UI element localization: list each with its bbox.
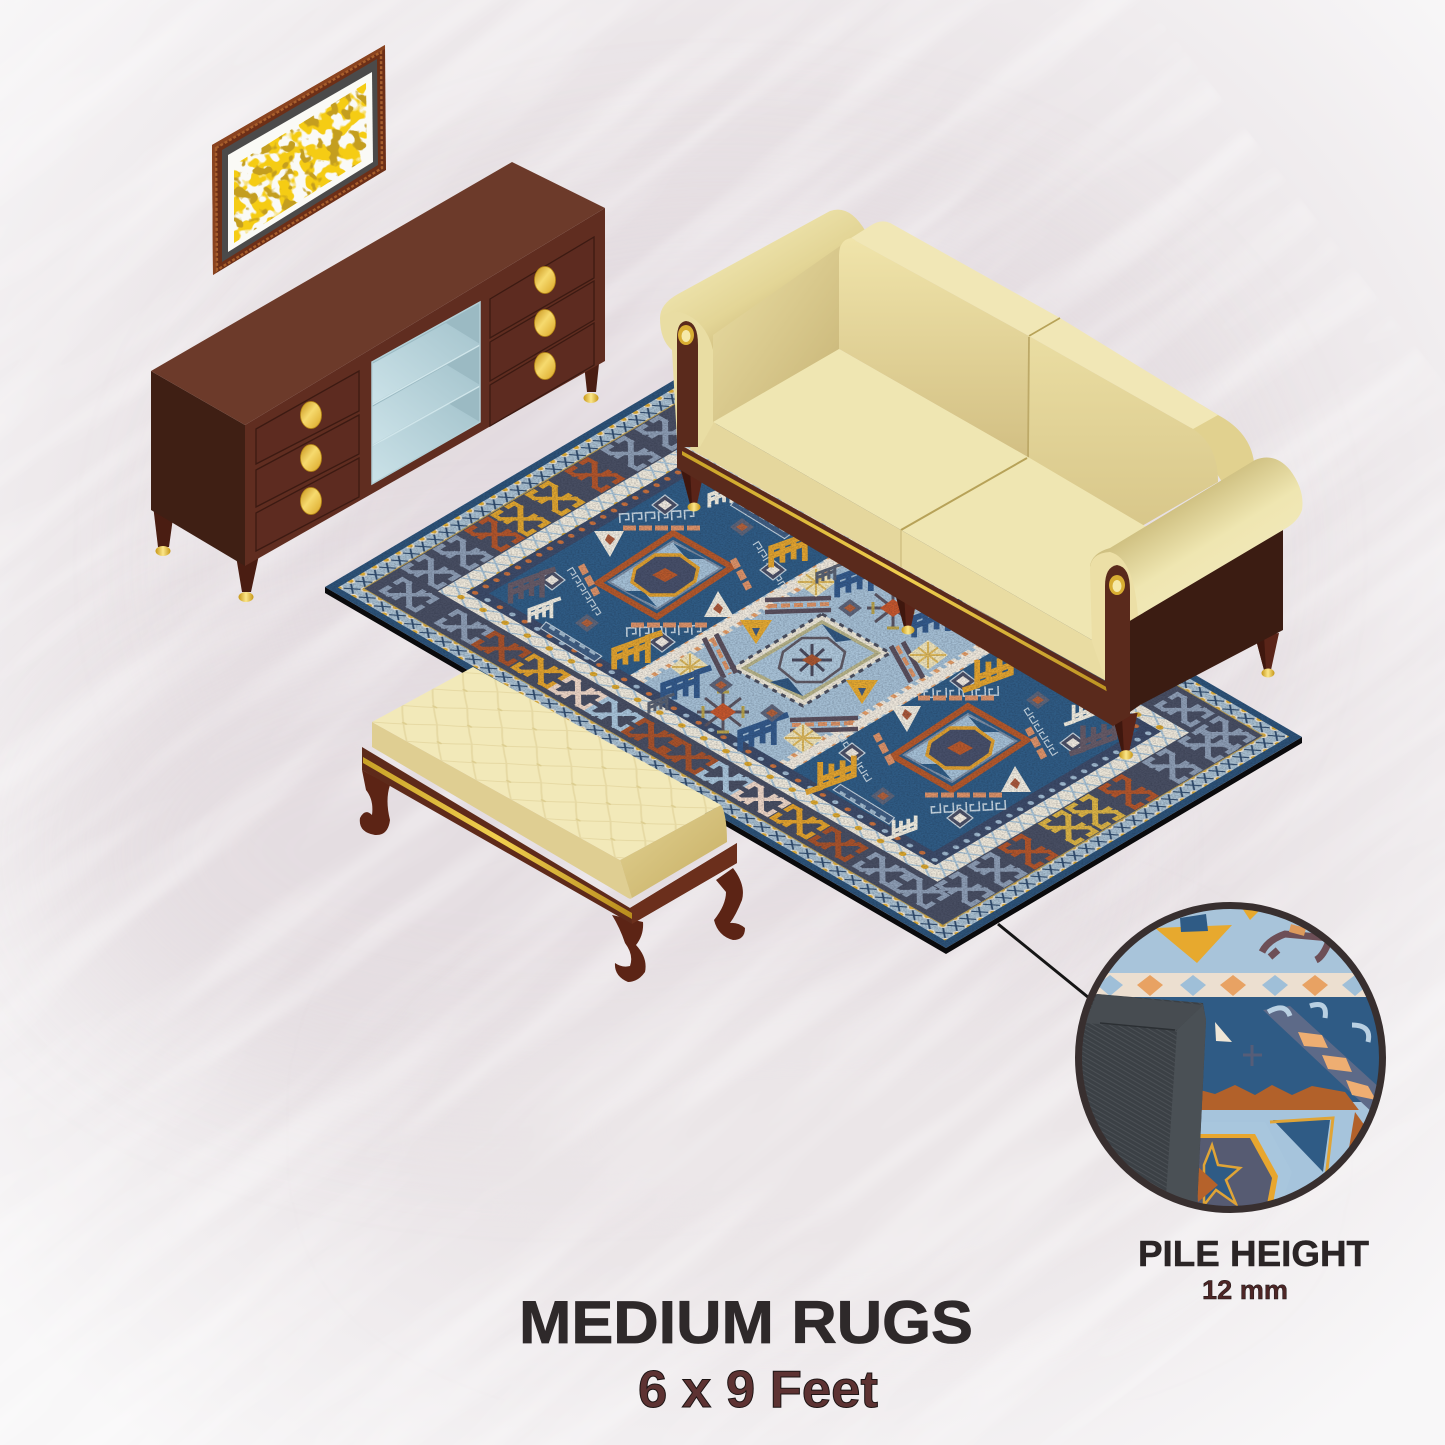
detail lens [1078, 906, 1382, 1210]
bench [360, 667, 745, 982]
bench tufted cushion top [372, 667, 721, 860]
sofa legs [681, 467, 1279, 760]
navy field [1132, 997, 1379, 1102]
slate diagonal key band [1263, 1006, 1382, 1115]
right arm post and ring [1105, 565, 1130, 726]
leader line from rug to detail lens [998, 924, 1094, 1002]
label: pile height value: 12 mm [1202, 1275, 1288, 1305]
rug medallion panel left [510, 483, 819, 669]
rug border motifs, short sides [398, 416, 1235, 905]
rug [325, 376, 1302, 954]
orange zigzag band [1202, 1085, 1359, 1110]
left arm post and ring [677, 321, 698, 447]
dark right side of sofa [1130, 530, 1283, 712]
cabinet drawers left [256, 371, 359, 551]
rug medallion panel centre [649, 561, 962, 753]
backrest top [851, 221, 1060, 336]
cream diamond strip [1096, 973, 1366, 997]
bench frame [362, 747, 737, 924]
seat fronts [690, 410, 901, 567]
open glass shelving [372, 302, 480, 484]
rug black edge [325, 587, 1302, 954]
bench cushion front [372, 722, 632, 899]
cabinet legs [153, 345, 601, 602]
right arm front cap [1090, 552, 1138, 688]
base rail [677, 443, 1130, 726]
framed wall picture [212, 45, 386, 275]
right arm roll [1090, 458, 1302, 616]
rug body in isometric rug space [325, 376, 1302, 948]
cabinet drawers right [490, 237, 594, 426]
rug backing fold [1079, 994, 1206, 1209]
gold triangles and hook [1155, 925, 1232, 963]
label: pile height: PILE HEIGHT [1138, 1233, 1369, 1274]
left arm front cap [660, 312, 713, 447]
bench legs [360, 770, 745, 982]
rug border motifs, lower long side [382, 579, 946, 907]
subtitle size: 6 x 9 Feet [638, 1361, 878, 1419]
brass drawer knobs [300, 266, 556, 514]
seat tops [713, 349, 1028, 530]
sofa [660, 210, 1302, 760]
gold abstract painting [234, 83, 367, 243]
rug medallion panel right [806, 654, 1114, 840]
rug border motifs, upper long side [723, 441, 1252, 749]
backrest faces [839, 238, 1029, 458]
title: MEDIUM RUGS [519, 1289, 973, 1356]
cabinet [151, 162, 605, 602]
lower pattern [1202, 1110, 1366, 1124]
wool texture [325, 376, 1302, 948]
right outer curve of backrest [1190, 404, 1254, 482]
left arm roll [660, 210, 866, 440]
left inner arm [713, 246, 840, 425]
